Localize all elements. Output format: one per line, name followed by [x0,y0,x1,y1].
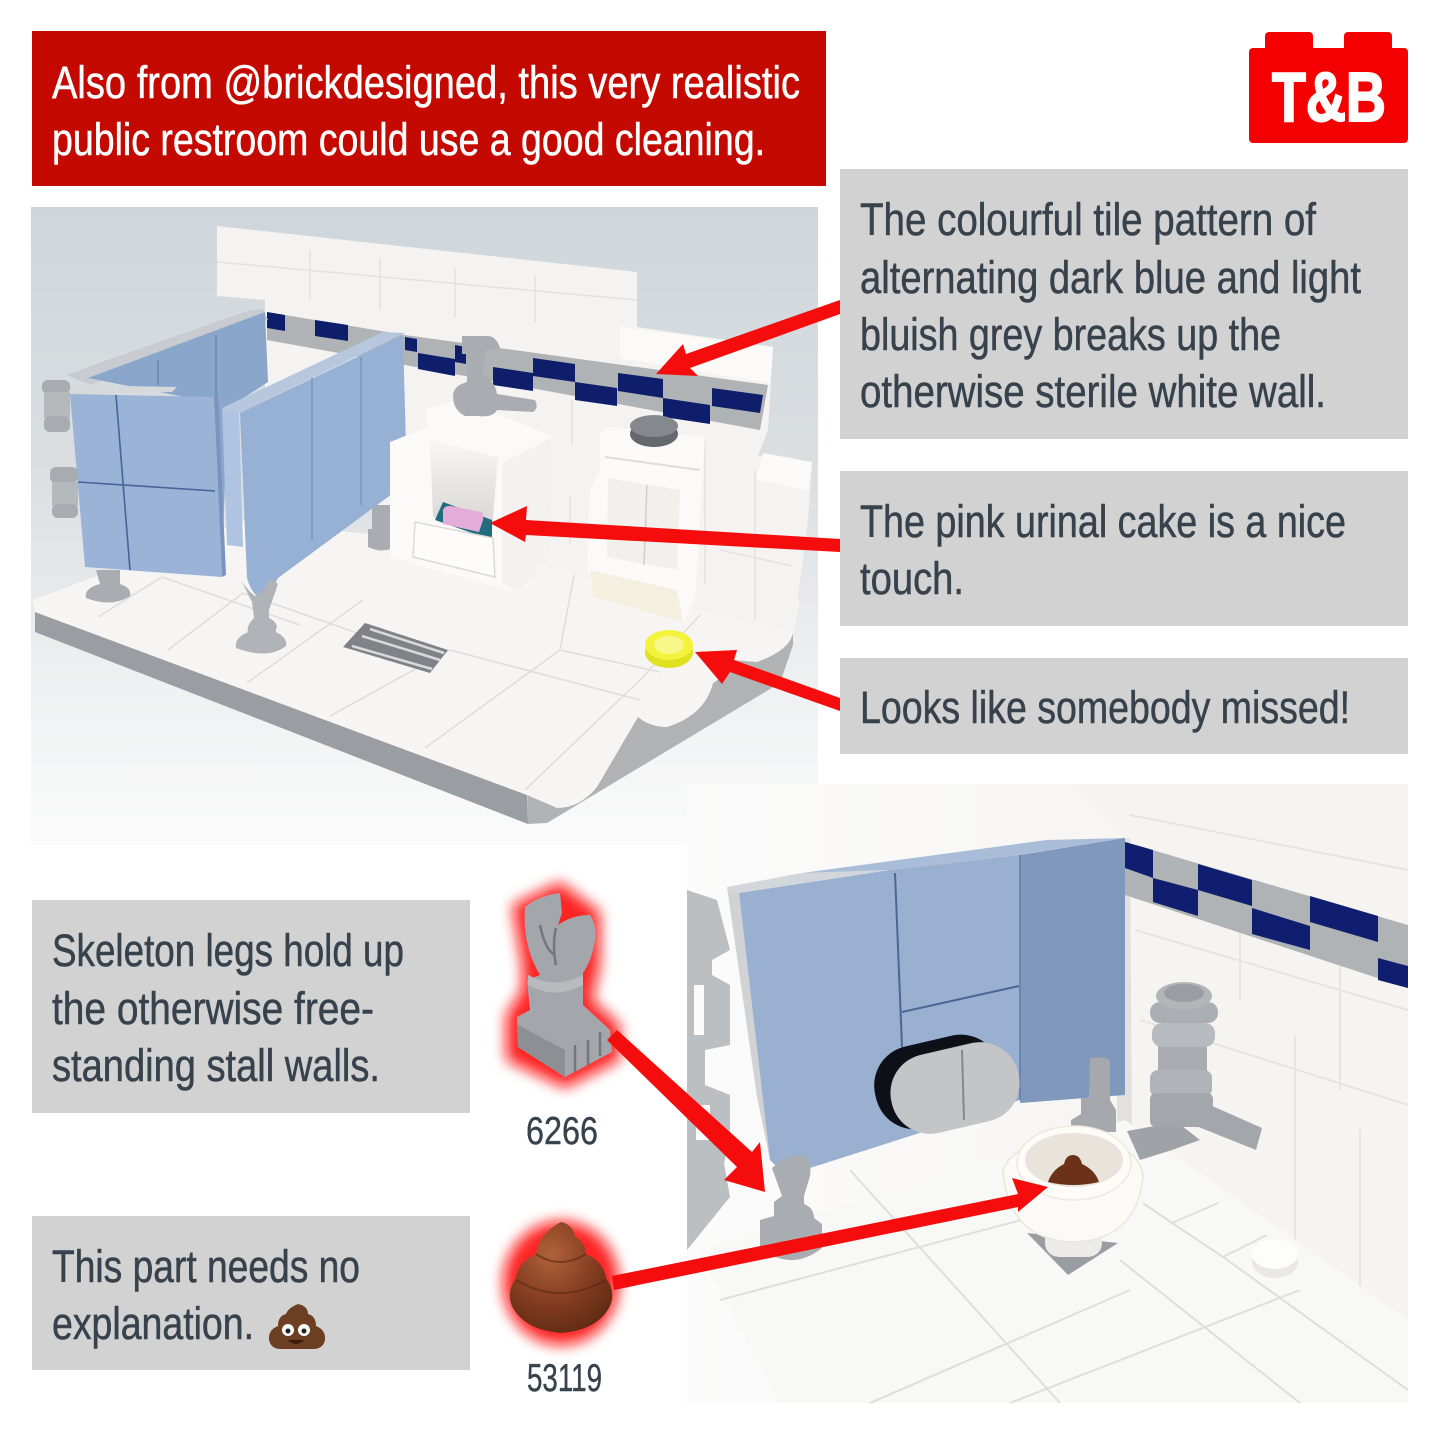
photo: stall close-up [687,784,1408,1403]
arrow: yellow puddle callout [695,650,840,711]
arrow: skeleton leg to stall foot [607,1030,765,1192]
skeleton leg [760,1156,822,1260]
callout: tile pattern: bluish grey breaks up the [860,309,1281,360]
floor [33,520,800,808]
toilet bowl with brown piece [1003,1126,1143,1275]
icon: poop emoji [269,1304,325,1349]
back wall [217,226,812,633]
yellow puddle stud [645,630,693,668]
callout: skeleton legs: the otherwise free- [52,983,374,1034]
callout: tile pattern [840,169,1408,439]
door cap [68,385,177,394]
stall foot left [86,570,130,603]
floor [697,1120,1408,1403]
back panel [67,309,268,385]
callout: somebody missed [840,658,1408,754]
second wall strip [222,408,243,547]
callout: somebody missed: Looks like somebody missed! [860,682,1350,733]
callout: skeleton legs: Skeleton legs hold up [52,925,404,976]
faucet [453,336,537,416]
callout: skeleton legs [32,900,470,1113]
hinges [42,380,78,518]
door latch [866,1027,1010,1137]
far feet [368,505,398,551]
lattice bracket [687,890,730,1250]
base plate [527,625,793,824]
callout: tile pattern: alternating dark blue and light [860,252,1361,303]
callout: no explanation: This part needs no [52,1241,360,1292]
label: 53119: 53119 [527,1357,602,1400]
callout: urinal cake: touch. [860,553,964,604]
wall [1075,784,1408,1320]
tile stripe [267,312,768,430]
urinal with pink cake [390,336,553,593]
stall walls [42,309,407,654]
stall foot right [236,578,286,654]
photo: restroom overview [31,207,818,845]
header banner [32,31,826,186]
second urinal [587,415,705,622]
second wall face [240,335,407,597]
callout: skeleton legs: standing stall walls. [52,1040,380,1091]
callout: no explanation: explanation. [52,1298,254,1349]
header banner: Also from @brickdesigned, this very realistic [52,57,800,108]
callout: no explanation [32,1216,470,1370]
arrow: poop to bowl [612,1178,1048,1290]
stall wall [727,870,890,893]
stud on floor [1252,1246,1298,1278]
callout: urinal cake [840,471,1408,626]
label: 6266: 6266 [526,1110,598,1153]
arrow: wall tile callout [656,300,840,376]
logo: T&B brick [1249,32,1408,143]
door [70,394,222,577]
callout: urinal cake: The pink urinal cake is a nice [860,496,1346,547]
callout: tile pattern: otherwise sterile white wall. [860,366,1326,417]
floor drain [343,623,448,673]
part: poop 53119 [503,1221,619,1345]
header banner: public restroom could use a good cleaning. [52,114,765,165]
second skeleton leg [1071,1057,1116,1132]
tile stripe [1125,842,1408,988]
part: skeleton legs 6266 [506,882,620,1088]
logo: T&B brick: T&B [1272,58,1386,136]
callout: tile pattern: The colourful tile pattern of [860,194,1316,245]
faucet pipe [1127,982,1262,1160]
arrow: urinal cake callout [490,506,840,552]
